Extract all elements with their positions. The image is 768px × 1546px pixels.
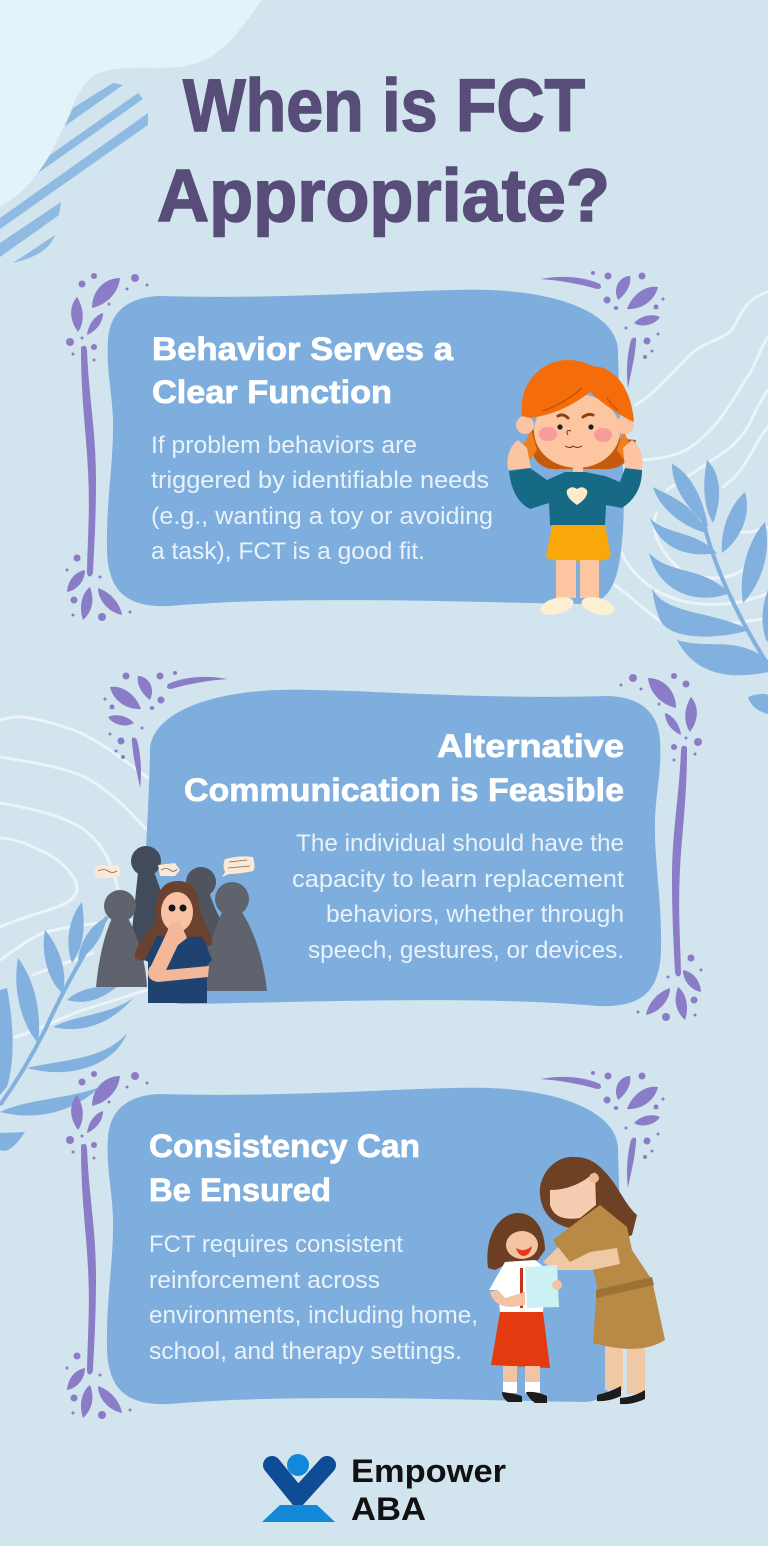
decorative top-left blob (0, 0, 262, 207)
body text: capacity to learn replacement (292, 866, 624, 893)
decorative white contour lines, left (0, 717, 148, 1037)
panel: consistency can be ensured (66, 1071, 665, 1419)
body text: school, and therapy settings. (149, 1338, 462, 1365)
body text: behaviors, whether through (326, 901, 624, 928)
heading: Be Ensured (149, 1172, 331, 1208)
decorative leaf branch, left (0, 902, 133, 1151)
body text: The individual should have the (296, 830, 624, 857)
body text: environments, including home, (149, 1302, 478, 1329)
body text: a task), FCT is a good fit. (151, 538, 425, 565)
decorative leaf branch, right (649, 460, 768, 714)
body text: FCT requires consistent (149, 1231, 403, 1258)
title: When is FCT (183, 64, 585, 147)
body text: speech, gestures, or devices. (308, 937, 624, 964)
heading: Alternative (437, 728, 624, 764)
logo: Empower ABA (262, 1453, 506, 1527)
card background (107, 290, 624, 606)
body text (149, 1231, 478, 1365)
heading (184, 728, 624, 808)
body text: If problem behaviors are (151, 432, 417, 459)
floral frame, right (620, 673, 702, 1021)
body text: (e.g., wanting a toy or avoiding (151, 503, 493, 530)
heading: Behavior Serves a (152, 331, 453, 367)
logo wordmark: Empower (351, 1453, 506, 1489)
title: Appropriate? (157, 154, 610, 237)
floral accent, top left (104, 671, 228, 788)
floral accent, top right (540, 1071, 664, 1188)
body text (292, 830, 624, 964)
body text (151, 432, 493, 565)
heading (152, 331, 453, 410)
body text: triggered by identifiable needs (151, 467, 489, 494)
floral accent, top right (540, 271, 664, 388)
logo wordmark: ABA (351, 1491, 426, 1527)
panel: behavior serves a clear function (66, 271, 664, 621)
heading: Consistency Can (149, 1128, 420, 1164)
panel: alternative communication is feasible (95, 671, 702, 1021)
icon: girl covering her ears (507, 360, 643, 618)
decorative stripes (0, 83, 148, 263)
decorative white contour lines, right (615, 292, 768, 626)
floral frame, left (66, 1071, 148, 1419)
icon: logo mark (262, 1454, 335, 1522)
card background (144, 690, 661, 1006)
title (157, 64, 610, 237)
floral frame, left (66, 273, 148, 621)
card background (107, 1088, 624, 1404)
body text: reinforcement across (149, 1267, 380, 1294)
icon: teacher hugging a student (487, 1157, 665, 1404)
heading: Communication is Feasible (184, 772, 624, 808)
heading (149, 1128, 420, 1208)
heading: Clear Function (152, 374, 392, 410)
logo wordmark (351, 1453, 506, 1527)
icon: anxious woman surrounded by silhouettes (95, 846, 267, 1003)
